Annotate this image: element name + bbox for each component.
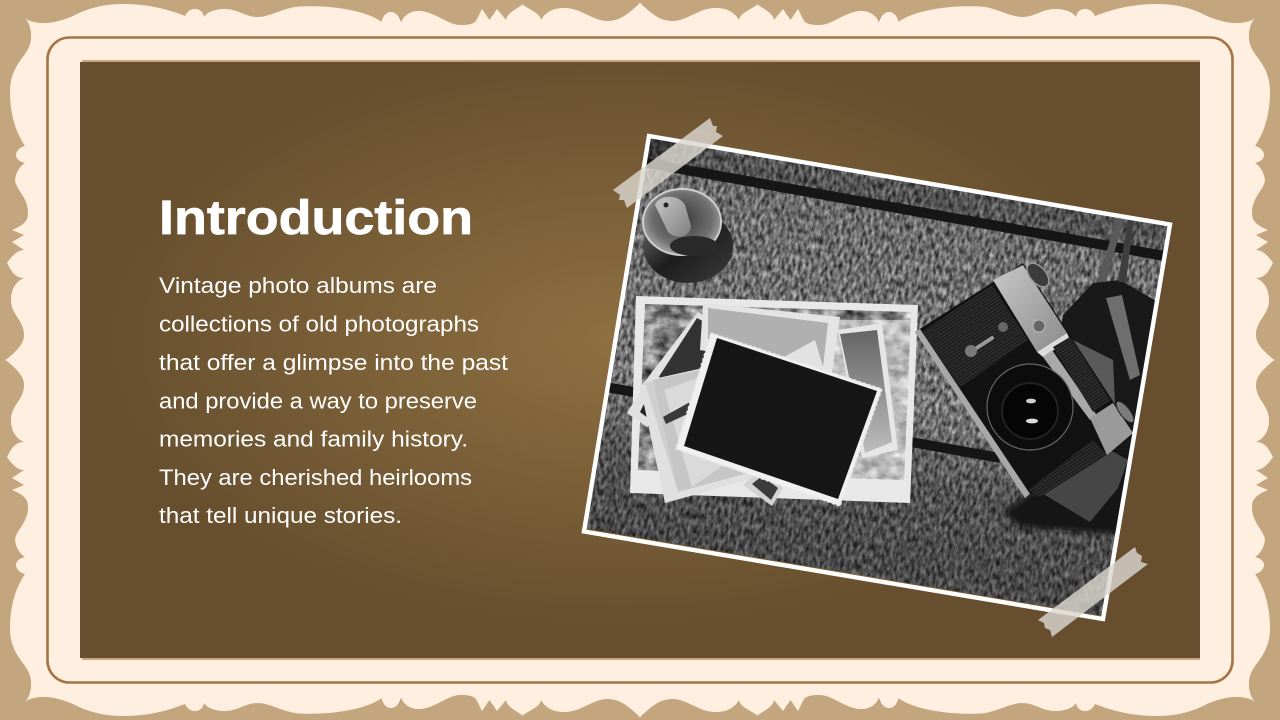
camera knobs and controls <box>965 259 1137 425</box>
white photo border <box>584 136 1170 619</box>
photo: vintage camera and prints on wood <box>582 134 1172 622</box>
tilted frame print <box>627 312 706 427</box>
lower left print strips <box>640 365 783 506</box>
body text block: collections of old photographs <box>159 312 479 336</box>
washi tape: bottom right <box>1038 547 1148 637</box>
right grey print <box>838 323 898 458</box>
backing print sheet <box>630 296 920 503</box>
panel: brown content background <box>80 60 1200 660</box>
black main print <box>676 333 882 506</box>
camera body <box>915 259 1137 498</box>
body text block: They are cherished heirlooms <box>159 465 472 490</box>
body text block <box>159 273 508 528</box>
candle in metal holder <box>643 189 733 283</box>
camera strap and case <box>1003 218 1175 535</box>
body text block: memories and family history. <box>159 426 468 452</box>
grey landscape print <box>700 303 840 372</box>
plank gaps <box>600 163 1170 458</box>
title: Introduction <box>159 192 473 245</box>
camera lens <box>987 364 1073 450</box>
wood table texture <box>586 138 1168 616</box>
body text block: and provide a way to preserve <box>159 388 477 414</box>
body text block: that tell unique stories. <box>159 503 402 528</box>
body text block: that offer a glimpse into the past <box>159 350 508 375</box>
body text block: Vintage photo albums are <box>159 273 437 298</box>
washi tape: top left <box>613 118 723 208</box>
